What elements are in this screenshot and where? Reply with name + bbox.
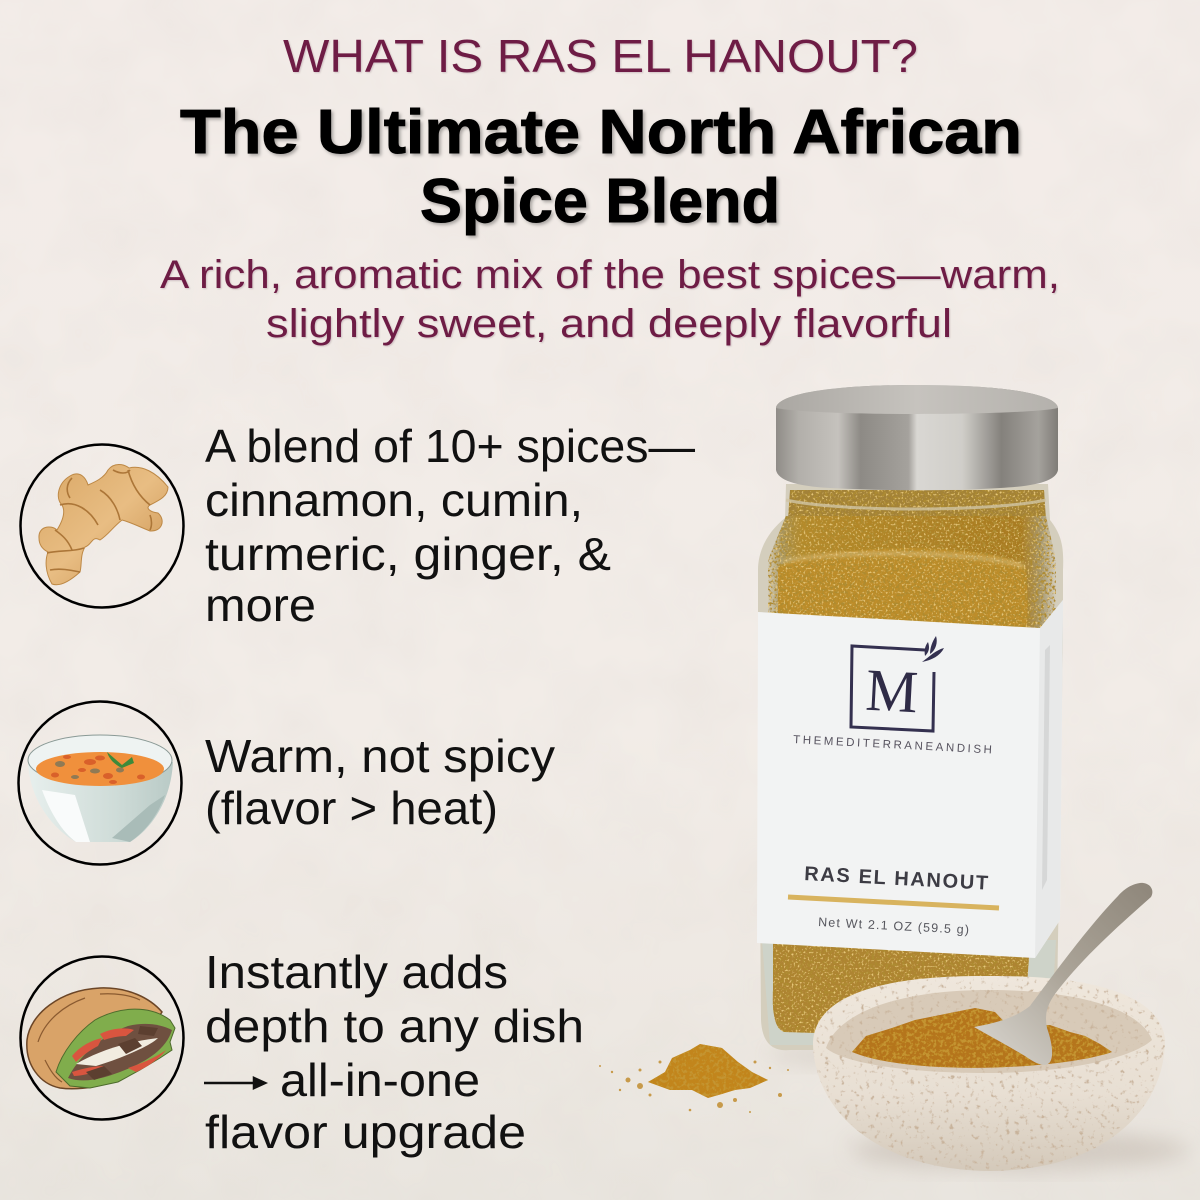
jar label: Net Wt 2.1 OZ (59.5 g) <box>818 915 969 937</box>
feature text: instantly adds depth: Instantly adds <box>205 946 508 998</box>
subtitle <box>160 253 1060 346</box>
logo: M <box>864 657 920 725</box>
feature text: blend of spices <box>205 420 695 631</box>
spice pile on table <box>599 1044 789 1113</box>
feature text: instantly adds depth: all-in-one <box>280 1054 480 1106</box>
subtitle: slightly sweet, and deeply flavorful <box>266 302 952 346</box>
jar shadow <box>770 1043 1110 1067</box>
feature: pita sandwich icon <box>20 956 184 1120</box>
feature text: blend of spices: A blend of 10+ spices— <box>205 420 695 472</box>
feature text: blend of spices: turmeric, ginger, & <box>205 528 611 580</box>
title: The Ultimate North African <box>180 98 1022 167</box>
feature text: warm not spicy <box>205 730 555 834</box>
feature text: warm not spicy: Warm, not spicy <box>205 730 555 782</box>
logo <box>851 636 944 731</box>
product photo: spice jar with bowl <box>599 385 1190 1171</box>
feature text: instantly adds depth <box>204 946 584 1158</box>
title <box>180 98 1022 236</box>
title: Spice Blend <box>420 167 780 236</box>
bowl with spice <box>813 883 1190 1171</box>
jar glass and spice <box>758 484 1063 1050</box>
feature text: blend of spices: cinnamon, cumin, <box>205 474 583 526</box>
feature text: warm not spicy: (flavor > heat) <box>205 782 498 834</box>
feature text: instantly adds depth: depth to any dish <box>205 1000 584 1052</box>
subtitle: A rich, aromatic mix of the best spices—warm, <box>160 253 1060 297</box>
jar label <box>757 600 1063 958</box>
arrow <box>204 1078 265 1088</box>
feature: ginger icon <box>20 444 184 608</box>
feature text: blend of spices: more <box>205 579 316 631</box>
spoon <box>974 883 1152 1065</box>
eyebrow heading: WHAT IS RAS EL HANOUT? <box>283 30 918 82</box>
jar label: RAS EL HANOUT <box>804 863 989 895</box>
jar lid <box>776 385 1058 490</box>
jar label: THEMEDITERRANEANDISH <box>793 734 993 756</box>
feature: soup bowl icon <box>18 702 182 864</box>
feature text: instantly adds depth: flavor upgrade <box>205 1106 526 1158</box>
